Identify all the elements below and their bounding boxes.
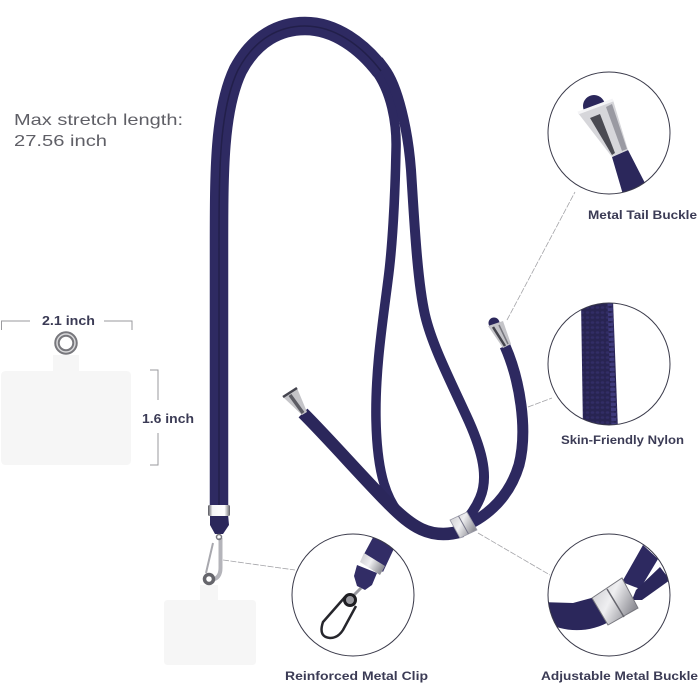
patch card lower bbox=[164, 585, 256, 665]
magnified tip bbox=[578, 95, 646, 198]
label: Reinforced Metal Clip bbox=[285, 669, 428, 683]
stretch length note bbox=[14, 112, 183, 150]
circle outline bbox=[292, 534, 414, 656]
cord strand one bbox=[372, 66, 462, 534]
strap end bbox=[210, 514, 229, 534]
cord strand two bbox=[378, 60, 484, 527]
stretch length note: Max stretch length: bbox=[14, 112, 183, 129]
magnified weave bbox=[581, 300, 618, 430]
neck strap seam bbox=[219, 26, 381, 505]
slider buckle bbox=[450, 512, 477, 538]
right metal tip bbox=[488, 318, 511, 348]
neck strap bbox=[219, 26, 381, 505]
detail: nylon bbox=[548, 300, 684, 447]
height dimension: 1.6 inch bbox=[142, 411, 194, 426]
left tail cord bbox=[303, 413, 462, 534]
lanyard strap bbox=[219, 26, 523, 534]
magnified clip bbox=[322, 530, 398, 638]
phone patch with dimensions bbox=[1, 313, 194, 465]
label: Metal Tail Buckle bbox=[588, 208, 697, 222]
detail: adjustable buckle bbox=[540, 534, 698, 683]
width dimension: 2.1 inch bbox=[42, 313, 95, 328]
width dimension bbox=[2, 313, 132, 330]
hook bbox=[204, 534, 222, 584]
height dimension bbox=[142, 370, 194, 465]
circle outline bbox=[548, 72, 670, 194]
strap end ferrule and hook bbox=[164, 505, 256, 665]
stretch length note: 27.56 inch bbox=[14, 133, 107, 150]
detail: metal clip bbox=[285, 530, 428, 683]
leader lines bbox=[223, 192, 575, 575]
ferrule bbox=[208, 505, 230, 516]
patch card bbox=[1, 355, 131, 465]
left metal tip bbox=[283, 388, 307, 415]
circle outline bbox=[548, 303, 670, 425]
detail: metal tail buckle bbox=[548, 72, 697, 222]
label: Adjustable Metal Buckle bbox=[541, 669, 698, 683]
patch eyelet bbox=[57, 334, 75, 352]
circle outline bbox=[548, 534, 670, 656]
magnified buckle bbox=[540, 545, 670, 630]
right tail cord bbox=[465, 346, 523, 526]
label: Skin-Friendly Nylon bbox=[561, 433, 684, 447]
